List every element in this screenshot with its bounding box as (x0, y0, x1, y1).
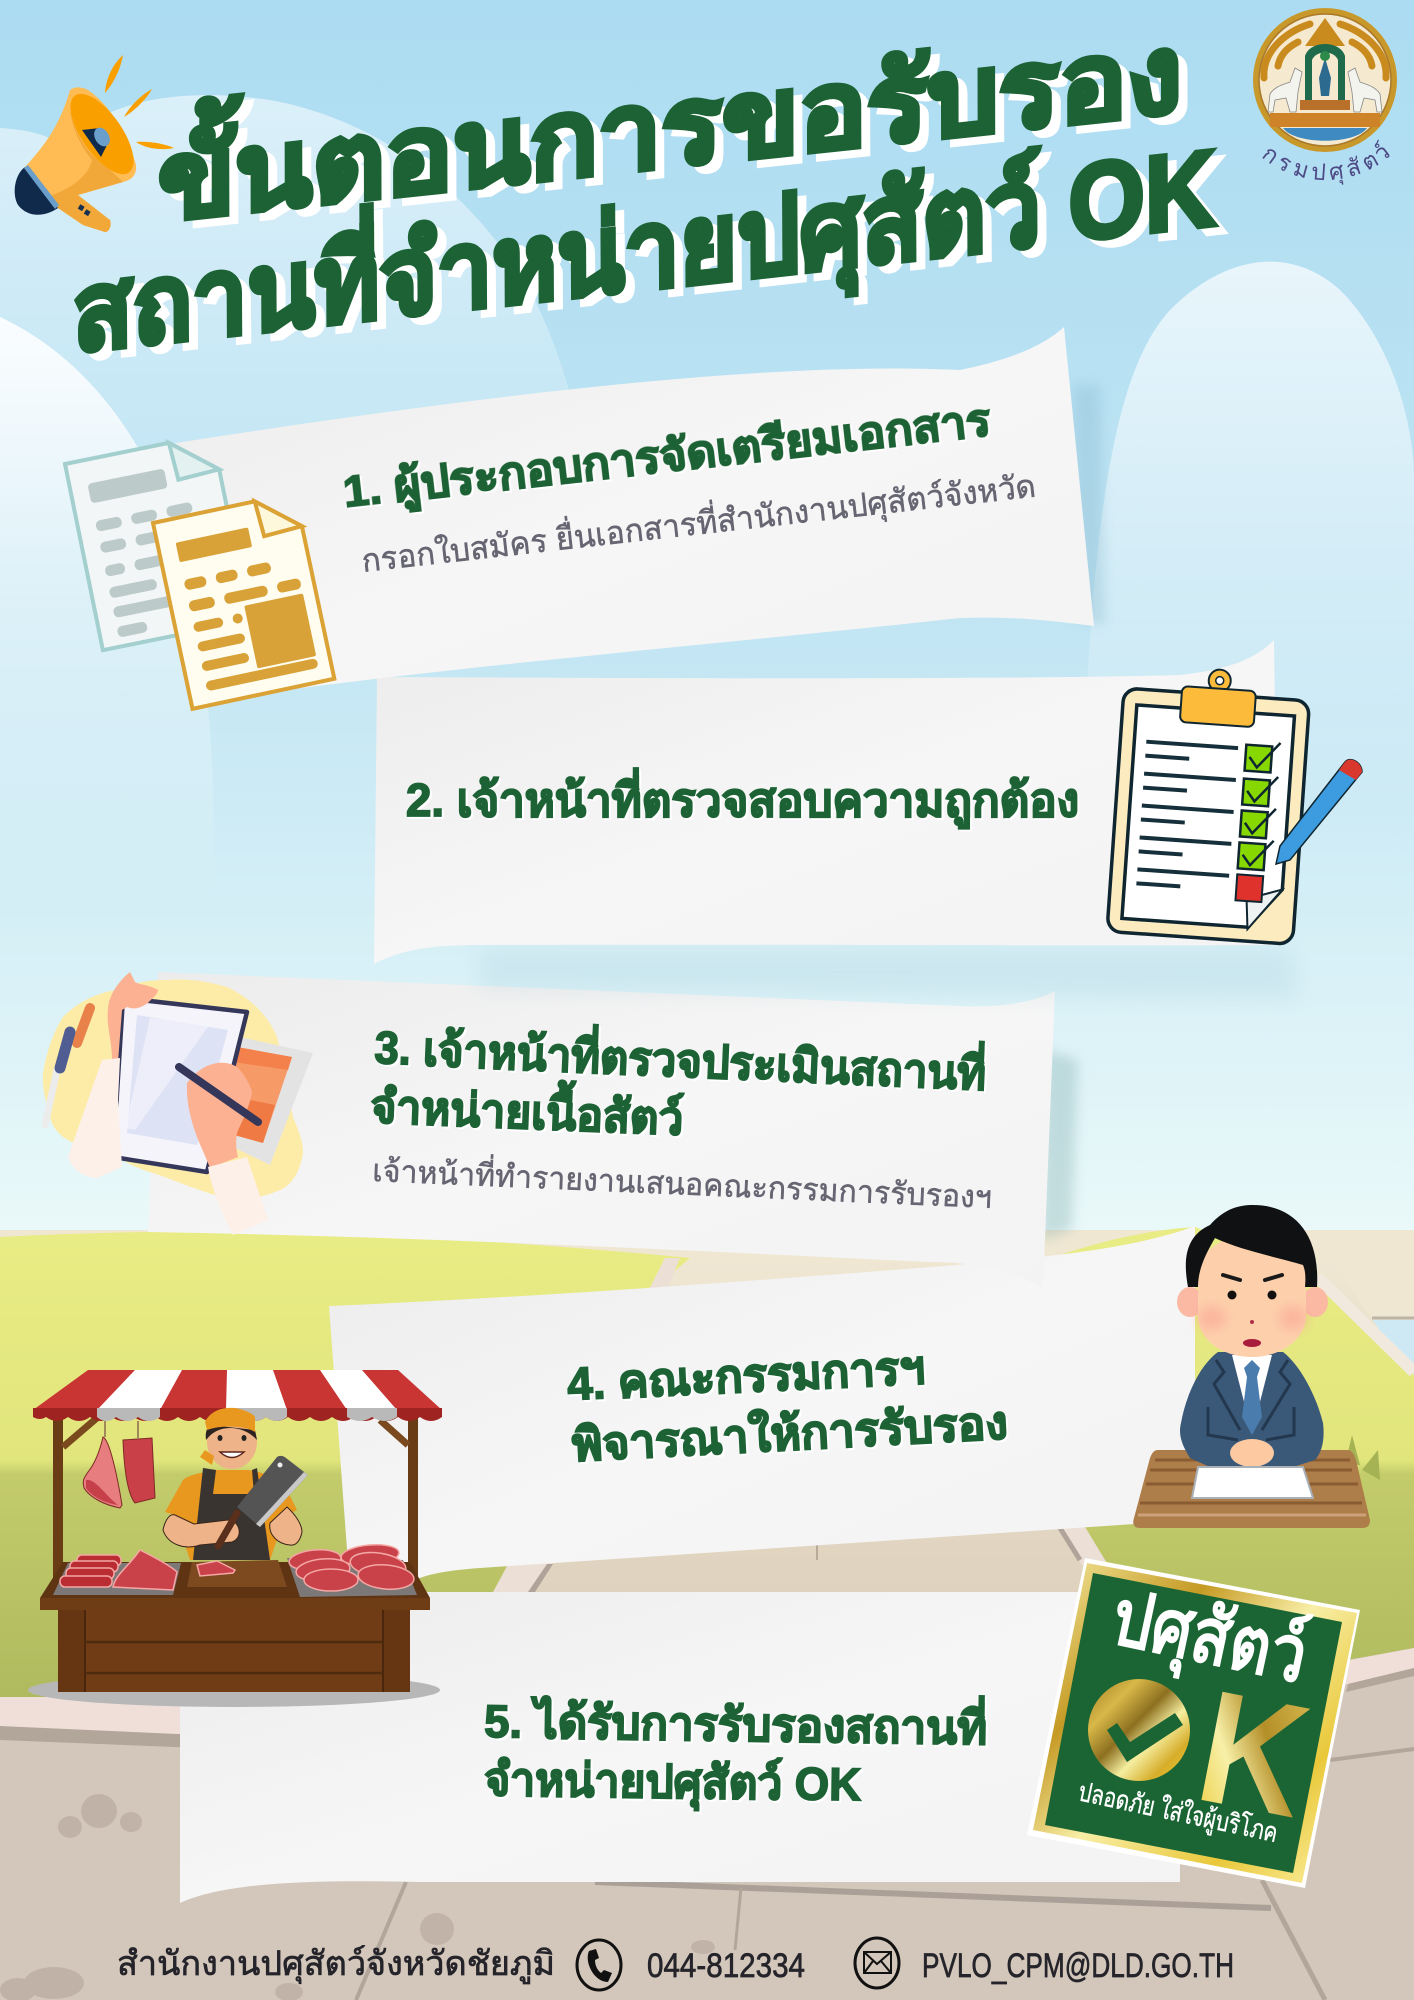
background: hills, road and pavement (0, 1227, 1414, 2000)
title (72, 0, 1225, 389)
heading: step 3: 3. เจ้าหน้าที่ตรวจประเมินสถานที่ (374, 1015, 988, 1100)
heading: step 3 (370, 1015, 988, 1145)
footer: office name: สำนักงานปศุสัตว์จังหวัดชัยภูมิ (117, 1945, 555, 1984)
heading: step 5: 5. ได้รับการรับรองสถานที่ (484, 1689, 988, 1754)
footer: phone number: 044-812334 (647, 1947, 805, 1985)
heading: step 4 (566, 1341, 1009, 1471)
seal caption: ก (1258, 140, 1284, 169)
icon: hands writing on tablet (43, 972, 313, 1235)
icon: documents (65, 434, 334, 709)
title: ขั้นตอนการขอรับรอง (158, 0, 1182, 243)
footer: email: PVLO_CPM@DLD.GO.TH (922, 1947, 1234, 1985)
panel: step 2 banner (374, 640, 1278, 964)
seal caption: ศุ (1327, 157, 1346, 186)
panel: step 1 banner (170, 327, 1094, 690)
heading: step 5 (484, 1689, 988, 1813)
awning (33, 1370, 442, 1421)
text: step 1 detail: กรอกใบสมัคร ยื่นเอกสารที่สำนักงานปศุสัตว์จังหวัด (359, 464, 1038, 581)
banner 1 shadow (1072, 385, 1105, 625)
background: sky (0, 0, 1414, 1300)
seal caption: ป (1310, 158, 1327, 185)
icon: phone (577, 1940, 621, 1990)
badge: ปศุสัตว์ OK: ปศุสัตว์ (1103, 1573, 1315, 1704)
meat counter (40, 1543, 430, 1692)
heading: step 1: 1. ผู้ประกอบการจัดเตรียมเอกสาร (341, 396, 994, 519)
badge: ปศุสัตว์ OK (1027, 1558, 1360, 1888)
banner 2 shadow (480, 950, 1300, 1000)
icon: butcher stall (28, 1370, 442, 1707)
heading: step 5: จำหน่ายปศุสัตว์ OK (484, 1753, 862, 1813)
icon: department seal (1253, 8, 1397, 186)
icon: megaphone (15, 55, 174, 232)
seal caption: ร (1273, 148, 1296, 177)
seal caption (1258, 138, 1395, 186)
background: clouds (0, 95, 1414, 900)
panel: step 4 banner (329, 1226, 1195, 1590)
heading: step 4: พิจารณาให้การรับรอง (571, 1395, 1009, 1471)
banner 3 shadow (1040, 1050, 1078, 1240)
heading: step 2: 2. เจ้าหน้าที่ตรวจสอบความถูกต้อง (406, 768, 1079, 829)
title: สถานที่จำหน่ายปศุสัตว์ OK (81, 118, 1225, 389)
heading: step 4: 4. คณะกรรมการฯ (566, 1341, 926, 1410)
panel: step 5 banner (180, 1592, 1180, 1903)
heading: step 3: จำหน่ายเนื้อสัตว์ (370, 1072, 685, 1145)
icon: mail (855, 1938, 899, 1988)
seal caption: ม (1290, 154, 1312, 183)
panel: step 3 banner (148, 972, 1055, 1288)
seal caption: สั (1343, 153, 1364, 182)
seal caption: ว์ (1369, 138, 1395, 167)
icon: official at desk (1133, 1205, 1380, 1528)
title: สถานที่จำหน่ายปศุสัตว์ OK (72, 111, 1216, 382)
butcher (163, 1408, 308, 1560)
title: ขั้นตอนการขอรับรอง (167, 0, 1191, 250)
badge: ปศุสัตว์ OK: K (1186, 1656, 1322, 1851)
seal caption: ต (1357, 145, 1382, 175)
text: step 3 detail: เจ้าหน้าที่ทำรายงานเสนอคณะกรรมการรับรองฯ (372, 1149, 993, 1215)
icon: clipboard with checklist and pencil (1107, 663, 1362, 944)
badge: ปศุสัตว์ OK: ปลอดภัย ใส่ใจผู้บริโภค (1076, 1776, 1281, 1849)
hanging meat (83, 1421, 155, 1508)
